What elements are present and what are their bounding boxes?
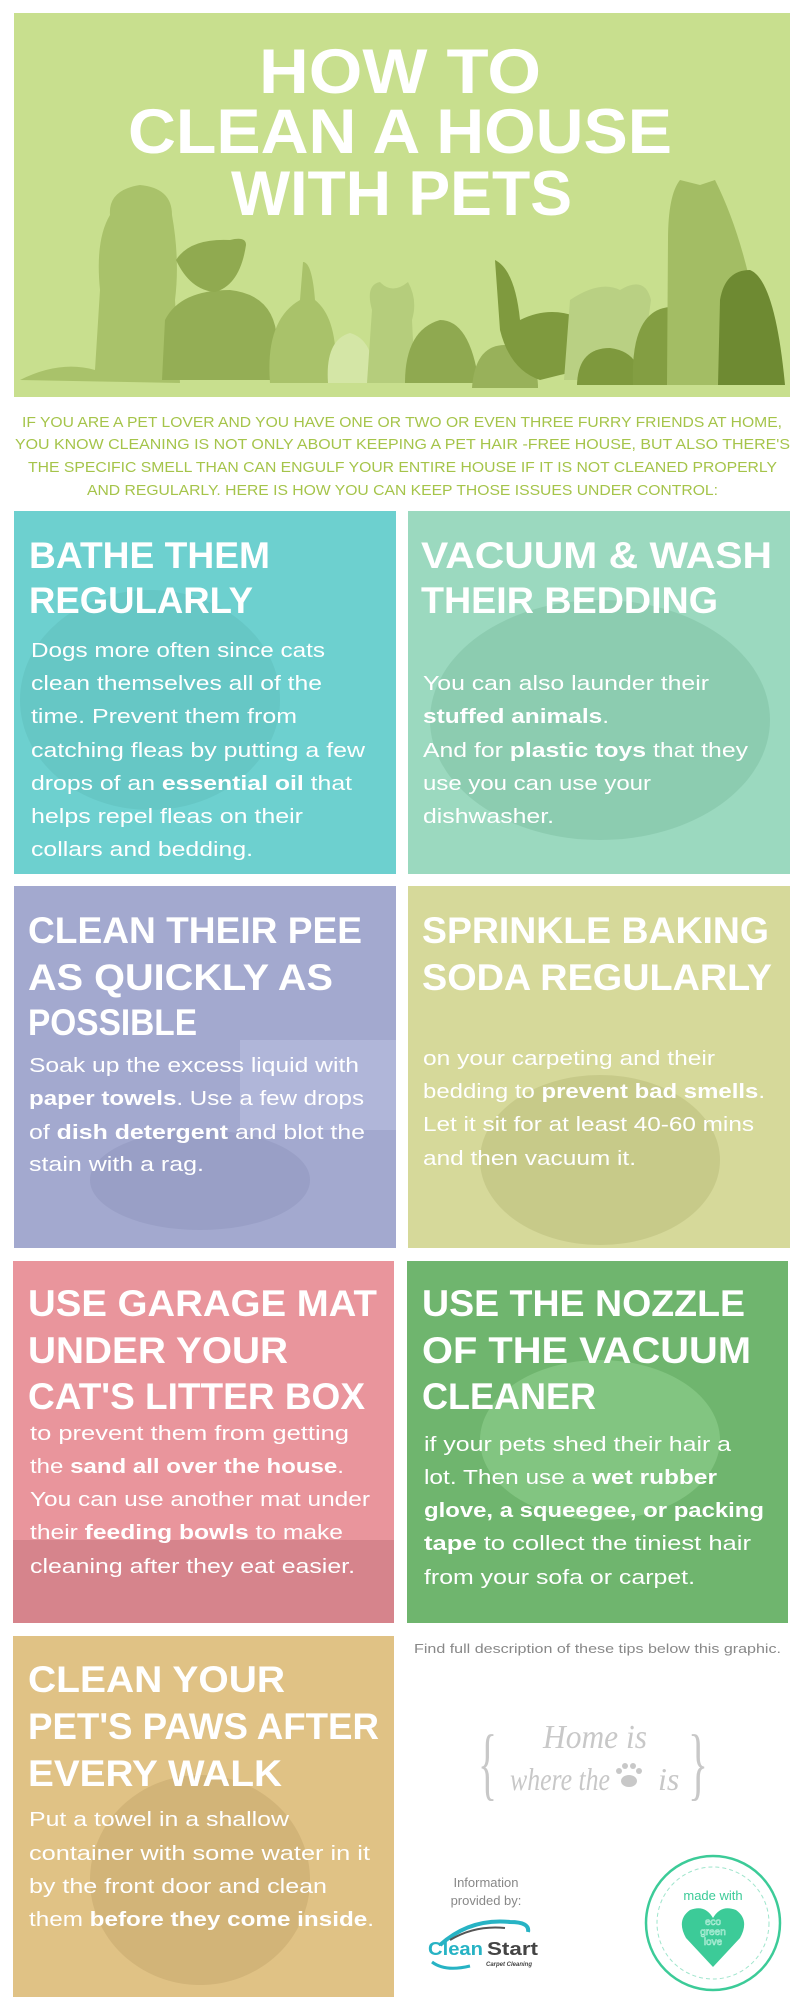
body text: lot. Then use a wet rubber	[424, 1467, 717, 1489]
badge: made with eco green love: green	[700, 1927, 726, 1938]
heading	[421, 535, 772, 621]
badge: made with eco green love	[646, 1856, 780, 1990]
body text: if your pets shed their hair a	[424, 1434, 732, 1456]
note text: Find full description of these tips below this graphic.	[414, 1641, 781, 1656]
title: WITH PETS	[231, 159, 572, 229]
logo: Clean Start: Carpet Cleaning	[486, 1962, 532, 1968]
credit: information provided by: provided by:	[451, 1893, 521, 1908]
body text: the sand all over the house .	[30, 1456, 344, 1478]
body text	[29, 1055, 365, 1176]
heading: CLEAN THEIR PEE	[28, 910, 362, 951]
body text: from your sofa or carpet.	[424, 1567, 695, 1589]
heading: VACUUM & WASH	[421, 535, 772, 576]
heading: EVERY WALK	[28, 1753, 282, 1794]
body text: their feeding bowls to make	[30, 1522, 343, 1544]
body text: by the front door and clean	[29, 1876, 327, 1898]
illustration: pets group	[20, 180, 785, 388]
logo: Clean Start: Clean	[428, 1939, 483, 1959]
heading: CLEAN YOUR	[28, 1659, 285, 1700]
body text: Put a towel in a shallow	[29, 1809, 290, 1831]
body text	[424, 1434, 764, 1589]
body text: and then vacuum it.	[423, 1148, 636, 1170]
panel: bathe them regularly	[14, 511, 396, 874]
logo: Clean Start: Start	[487, 1939, 538, 1959]
intro text: AND REGULARLY. HERE IS HOW YOU CAN KEEP THOSE ISSUES UNDER CONTROL:	[87, 482, 718, 499]
panel: nozzle of the vacuum	[407, 1261, 788, 1623]
panel: clean their pee	[14, 886, 396, 1248]
body text	[31, 640, 366, 861]
body text: to prevent them from getting	[30, 1423, 349, 1445]
heading: POSSIBLE	[28, 1002, 197, 1043]
heading	[422, 1283, 751, 1417]
body text: drops of an essential oil that	[31, 773, 353, 795]
header panel	[14, 13, 790, 397]
body text: collars and bedding.	[31, 839, 253, 861]
panel: garage mat	[13, 1261, 394, 1623]
body text: glove, a squeegee, or packing	[424, 1500, 764, 1522]
quote: home is where the paw is: Home is	[542, 1719, 647, 1756]
heading: REGULARLY	[29, 580, 253, 621]
badge: made with eco green love: made with	[683, 1888, 743, 1903]
body text: time. Prevent them from	[31, 706, 297, 728]
badge: made with eco green love: love	[704, 1937, 723, 1948]
body text: on your carpeting and their	[423, 1048, 715, 1070]
icon: paw	[616, 1763, 642, 1787]
panel: clean paws	[13, 1636, 394, 1997]
heading: AS QUICKLY AS	[28, 957, 333, 998]
title	[128, 37, 672, 229]
heading: BATHE THEM	[29, 535, 270, 576]
body text	[423, 673, 748, 828]
body text: You can also launder their	[423, 673, 709, 695]
quote: home is where the paw is: is	[658, 1761, 679, 1797]
body text: clean themselves all of the	[31, 673, 322, 695]
intro text	[15, 414, 790, 499]
credit: information provided by	[451, 1875, 521, 1908]
title: CLEAN A HOUSE	[128, 97, 672, 167]
title: HOW TO	[259, 37, 541, 107]
body text: stuffed animals .	[423, 706, 609, 728]
body text: container with some water in it	[29, 1843, 371, 1865]
quote: home is where the paw is: {	[478, 1720, 497, 1808]
intro text: YOU KNOW CLEANING IS NOT ONLY ABOUT KEEPING A PET HAIR -FREE HOUSE, BUT ALSO THERE'S	[15, 436, 790, 453]
heading: USE THE NOZZLE	[422, 1283, 745, 1324]
body text: Soak up the excess liquid with	[29, 1055, 359, 1077]
panel: vacuum & wash their bedding	[408, 511, 790, 874]
body text	[30, 1423, 370, 1578]
logo: Clean Start	[428, 1921, 538, 1968]
quote: home is where the paw is	[478, 1719, 708, 1808]
body text	[29, 1809, 374, 1931]
heading: PET'S PAWS AFTER	[28, 1706, 379, 1747]
body text: helps repel fleas on their	[31, 806, 303, 828]
body text: use you can use your	[423, 773, 651, 795]
heading: SPRINKLE BAKING	[422, 910, 769, 951]
intro text: IF YOU ARE A PET LOVER AND YOU HAVE ONE OR TWO OR EVEN THREE FURRY FRIENDS AT HOME,	[22, 414, 782, 431]
credit: information provided by: Information	[453, 1875, 519, 1890]
heading: USE GARAGE MAT	[28, 1283, 377, 1324]
heading	[422, 910, 772, 998]
body text: Let it sit for at least 40-60 mins	[423, 1114, 754, 1136]
body text	[423, 1048, 765, 1170]
quote: home is where the paw is: }	[688, 1720, 708, 1808]
intro text: THE SPECIFIC SMELL THAN CAN ENGULF YOUR ENTIRE HOUSE IF IT IS NOT CLEANED PROPERLY	[28, 459, 777, 476]
heading	[29, 535, 270, 621]
body text: bedding to prevent bad smells .	[423, 1081, 765, 1103]
heading: UNDER YOUR	[28, 1330, 288, 1371]
body text: cleaning after they eat easier.	[30, 1556, 355, 1578]
heading: CLEANER	[422, 1376, 596, 1417]
body text: tape to collect the tiniest hair	[424, 1533, 751, 1555]
body text: Dogs more often since cats	[31, 640, 325, 662]
body text: paper towels . Use a few drops	[29, 1088, 364, 1110]
heading	[28, 910, 362, 1043]
heading: SODA REGULARLY	[422, 957, 772, 998]
heading: OF THE VACUUM	[422, 1330, 751, 1371]
panel: sprinkle baking soda	[408, 886, 790, 1248]
heading: CAT'S LITTER BOX	[28, 1376, 365, 1417]
heading: THEIR BEDDING	[421, 580, 718, 621]
body text: of dish detergent and blot the	[29, 1122, 365, 1144]
body text: catching fleas by putting a few	[31, 740, 366, 762]
quote: home is where the paw is: where the	[510, 1761, 610, 1797]
heading	[28, 1659, 379, 1794]
heading	[28, 1283, 377, 1417]
body text: And for plastic toys that they	[423, 740, 748, 762]
body text: stain with a rag.	[29, 1154, 204, 1176]
body text: them before they come inside .	[29, 1909, 374, 1931]
badge: made with eco green love: eco	[705, 1917, 721, 1928]
body text: dishwasher.	[423, 806, 554, 828]
body text: You can use another mat under	[30, 1489, 370, 1511]
